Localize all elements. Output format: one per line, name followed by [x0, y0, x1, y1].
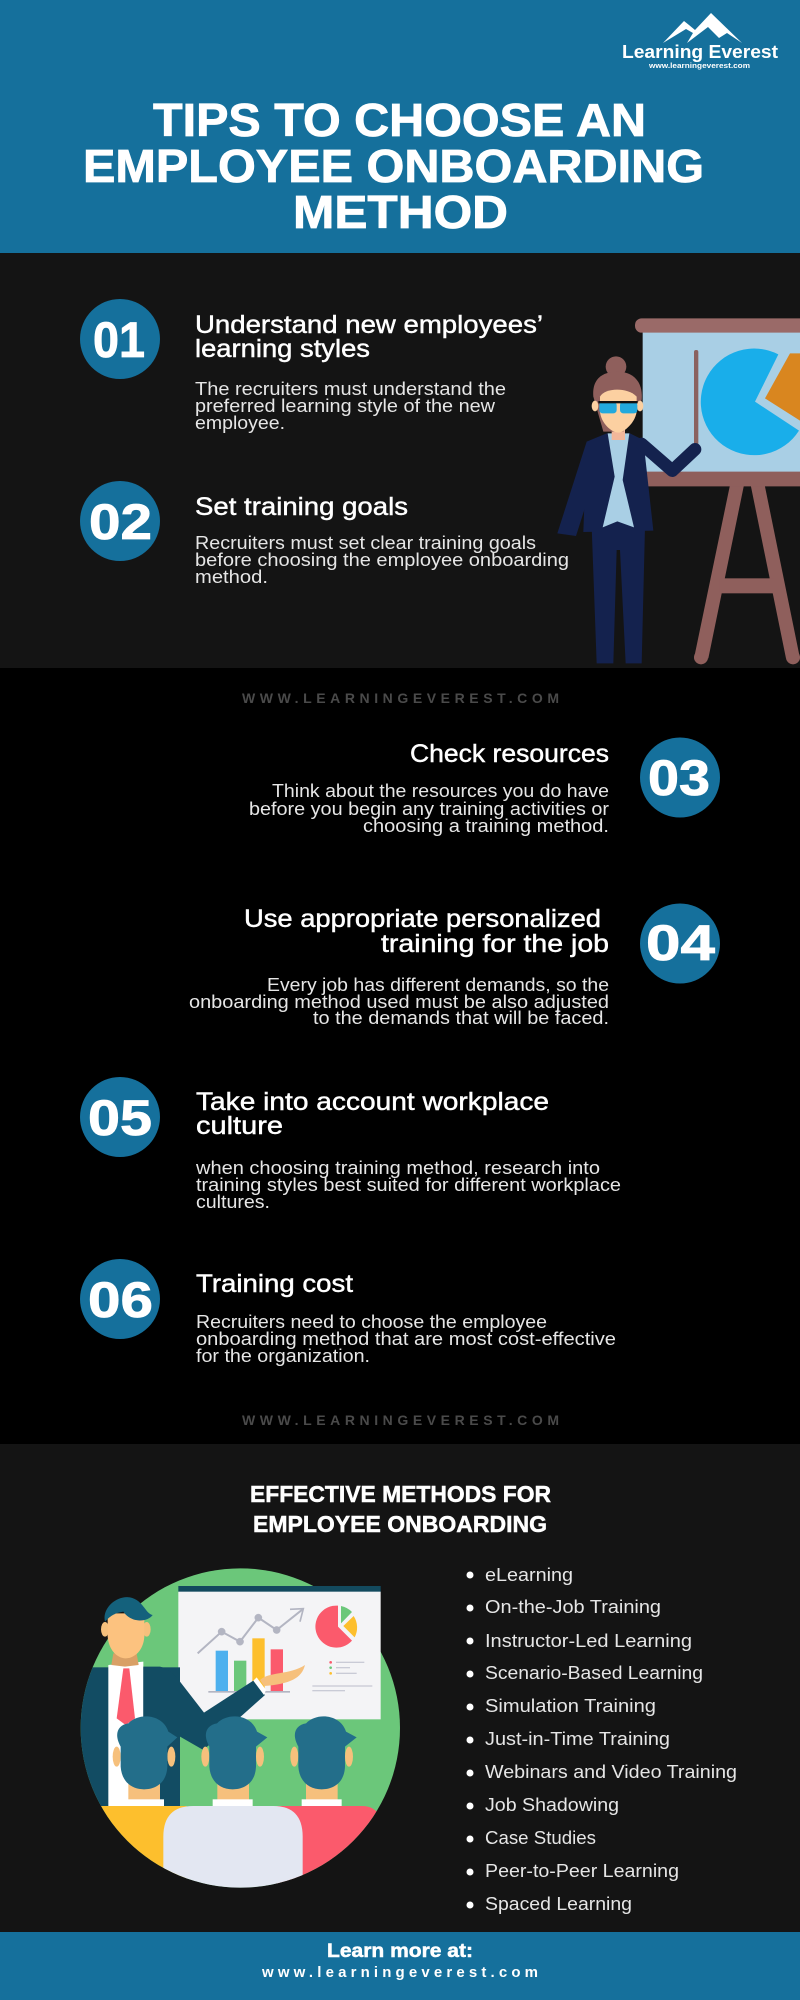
badge 03	[640, 738, 720, 818]
text 06: onboarding method that are most cost-effective	[196, 1329, 616, 1349]
text 04: to the demands that will be faced.	[313, 1008, 609, 1028]
easel legs	[694, 485, 800, 664]
title: METHOD	[293, 186, 508, 238]
badge 06	[80, 1259, 160, 1339]
methods heading: EFFECTIVE METHODS FOR	[250, 1481, 551, 1507]
pointer	[694, 350, 698, 445]
text 02: before choosing the employee onboarding	[195, 550, 569, 570]
seats and shoulders	[101, 1806, 376, 1888]
text 05: when choosing training method, research into	[195, 1158, 600, 1178]
logo: Learning Everest: Learning Everest	[622, 42, 778, 62]
title: TIPS TO CHOOSE AN	[153, 94, 646, 146]
tip 04	[189, 904, 720, 1028]
heading 02: Set training goals	[195, 493, 408, 521]
watermark top: WWW.LEARNINGEVEREST.COM	[242, 690, 559, 706]
badge 02: 02	[89, 494, 152, 550]
trainer arm	[143, 1665, 305, 1750]
text 06: for the organization.	[196, 1346, 370, 1366]
badge 02	[80, 481, 160, 561]
text 04: Every job has different demands, so the	[267, 975, 609, 995]
badge 03: 03	[648, 750, 710, 806]
list item: Scenario-Based Learning	[485, 1663, 703, 1683]
heading 05: Take into account workplace	[196, 1088, 549, 1116]
badge 04: 04	[646, 915, 715, 971]
heading 05: culture	[196, 1112, 283, 1140]
heading 04	[244, 905, 609, 958]
text 01	[195, 379, 506, 433]
text 02	[195, 533, 569, 587]
bar chart	[208, 1638, 290, 1693]
text 04: onboarding method used must be also adjusted	[189, 992, 609, 1012]
badge 01: 01	[93, 312, 145, 368]
tip 05	[80, 1077, 621, 1212]
methods list	[466, 1565, 737, 1914]
badge 05	[80, 1077, 160, 1157]
text 05: training styles best suited for different workplace	[196, 1175, 621, 1195]
panel: tips 1 and 2	[0, 253, 800, 668]
title	[83, 94, 704, 238]
methods heading	[250, 1481, 551, 1537]
illustration: trainer presenting to audience	[80, 1568, 400, 1888]
text 03: choosing a training method.	[363, 816, 609, 836]
pie chart	[315, 1606, 357, 1648]
heading 04: training for the job	[381, 930, 609, 958]
text 03: Think about the resources you do have	[272, 781, 609, 801]
logo: Learning Everest	[622, 13, 778, 70]
presentation board	[178, 1586, 381, 1719]
tip 02	[80, 481, 569, 587]
text 05	[195, 1158, 621, 1212]
panel: header	[0, 0, 800, 253]
watermark bottom: WWW.LEARNINGEVEREST.COM	[242, 1412, 559, 1428]
chart legend	[312, 1661, 372, 1691]
heading 04: Use appropriate personalized	[244, 905, 601, 933]
list item: Job Shadowing	[485, 1795, 619, 1815]
attendee middle	[201, 1716, 267, 1806]
panel: tips 3 to 6	[0, 668, 800, 1444]
list item: On-the-Job Training	[485, 1597, 661, 1617]
text 06	[196, 1312, 616, 1366]
green circle	[81, 1568, 400, 1888]
list item: Just-in-Time Training	[485, 1729, 670, 1749]
list item: Simulation Training	[485, 1696, 656, 1716]
heading 01: learning styles	[195, 335, 370, 363]
heading 01	[195, 311, 543, 363]
list item: Spaced Learning	[485, 1894, 632, 1914]
footer text: Learn more at:	[327, 1941, 473, 1962]
line chart	[198, 1609, 303, 1653]
list item: Peer-to-Peer Learning	[485, 1861, 679, 1881]
heading 05	[196, 1088, 549, 1140]
trainer body	[80, 1662, 180, 1811]
badge 06: 06	[88, 1272, 153, 1328]
board	[635, 318, 800, 486]
text 01: The recruiters must understand the	[195, 379, 506, 399]
text 06: Recruiters need to choose the employee	[196, 1312, 547, 1332]
tip 03	[249, 738, 720, 836]
list item: Webinars and Video Training	[485, 1762, 737, 1782]
text 02: Recruiters must set clear training goals	[195, 533, 536, 553]
badge 04	[640, 904, 720, 984]
trainer head	[101, 1597, 153, 1667]
footer text: www.learningeverest.com	[261, 1964, 538, 1981]
methods heading: EMPLOYEE ONBOARDING	[253, 1511, 547, 1537]
attendee right	[290, 1716, 357, 1806]
tip 06	[80, 1259, 616, 1366]
heading 03: Check resources	[410, 740, 609, 768]
trainer	[80, 1597, 305, 1811]
text 05: cultures.	[196, 1192, 270, 1212]
text 04	[189, 975, 609, 1028]
badge 05: 05	[88, 1090, 152, 1146]
pie chart	[701, 349, 800, 455]
tip 01	[80, 299, 543, 433]
logo: Learning Everest: www.learningeverest.com	[648, 63, 750, 70]
footer text	[261, 1941, 538, 1981]
text 01: preferred learning style of the new	[195, 396, 496, 416]
title: EMPLOYEE ONBOARDING	[83, 140, 704, 192]
text 01: employee.	[195, 413, 285, 433]
list item: Case Studies	[485, 1828, 596, 1848]
text 03	[249, 781, 609, 836]
heading 06: Training cost	[196, 1270, 353, 1298]
woman figure	[557, 356, 695, 663]
badge 01	[80, 299, 160, 379]
heading 01: Understand new employees’	[195, 311, 543, 339]
illustration: presenter with easel and pie chart	[557, 318, 800, 664]
list item: eLearning	[485, 1565, 573, 1585]
text 03: before you begin any training activities or	[249, 799, 609, 819]
footer band	[0, 1932, 800, 2000]
audience	[101, 1716, 376, 1888]
panel: effective methods	[0, 1444, 800, 1932]
text 02: method.	[195, 567, 268, 587]
attendee left	[113, 1716, 177, 1806]
list item: Instructor-Led Learning	[485, 1631, 692, 1651]
